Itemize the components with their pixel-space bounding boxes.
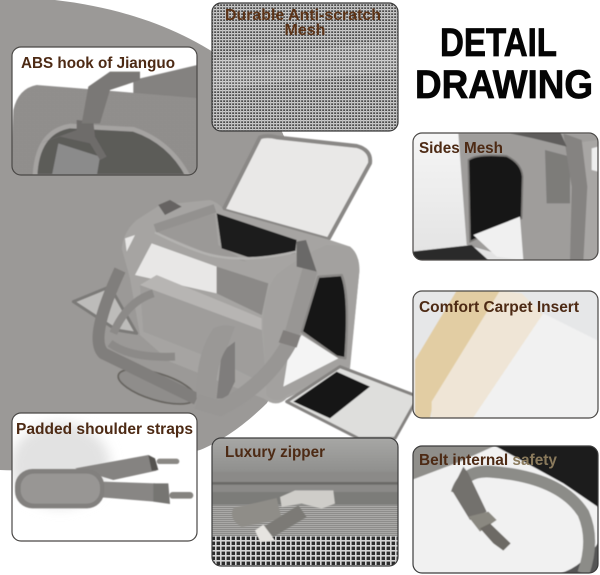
large mesh strip	[212, 536, 398, 566]
front door opening	[302, 275, 347, 358]
panel: anti-scratch mesh	[212, 3, 398, 131]
mesh outline	[212, 3, 398, 131]
end face	[263, 245, 359, 400]
fine mesh band	[212, 505, 398, 536]
front handle loop	[197, 325, 235, 398]
carpet photo	[412, 289, 600, 420]
panel: padded shoulder straps	[10, 413, 197, 541]
panel: luxury zipper	[212, 437, 398, 566]
opening piping	[155, 232, 297, 258]
black interior	[217, 213, 297, 258]
top opening	[155, 213, 247, 262]
panel: internal safety belt	[412, 445, 600, 575]
panel: ABS hook	[10, 47, 200, 177]
lower front fabric	[140, 285, 267, 385]
fabric band	[140, 275, 262, 330]
front handle	[217, 342, 235, 398]
carpet outline	[413, 291, 598, 418]
window sliver	[125, 235, 135, 252]
top back bar	[155, 208, 215, 228]
straps photo	[12, 414, 196, 510]
mesh label: Durable Anti-scratch	[225, 7, 381, 24]
carrier drawing	[73, 200, 418, 438]
top hook	[158, 200, 182, 215]
zipper outline	[212, 438, 398, 566]
side mesh panel	[217, 267, 268, 315]
open lid	[223, 136, 370, 239]
front door flap	[287, 367, 418, 438]
title line one: DETAIL	[440, 21, 557, 65]
left strap	[99, 270, 197, 399]
shoulder strap	[197, 270, 310, 408]
sides mesh outline	[413, 133, 598, 260]
grey background shape	[0, 0, 303, 470]
white window	[135, 243, 217, 293]
title	[415, 21, 593, 107]
straps outline	[12, 413, 197, 541]
zipper photo	[212, 437, 398, 566]
strap slider	[279, 330, 301, 348]
belt photo	[412, 445, 600, 575]
ABS hook outline	[12, 47, 197, 175]
left handle	[110, 293, 175, 357]
shoulder pad	[115, 362, 199, 411]
sides mesh photo	[412, 132, 600, 262]
left door flap	[73, 287, 137, 333]
flap black lining	[293, 372, 370, 418]
mesh label: Mesh	[285, 22, 325, 39]
sides mesh label: Sides Mesh	[419, 140, 503, 157]
straps label: Padded shoulder straps	[16, 421, 193, 438]
carrier body	[122, 200, 359, 403]
zipper label: Luxury zipper	[225, 444, 325, 461]
ABS hook photo	[10, 47, 200, 177]
fleece pad	[283, 335, 338, 387]
product photo: open pet carrier	[73, 136, 418, 438]
carpet label: Comfort Carpet Insert	[419, 299, 580, 316]
panel: sides mesh	[412, 132, 600, 262]
panel: comfort carpet insert	[412, 289, 600, 420]
ABS hook label: ABS hook of Jianguo	[21, 55, 175, 72]
strap top buckle	[297, 240, 317, 272]
belt label: Belt internal safety	[419, 452, 557, 469]
mesh photo	[212, 3, 398, 131]
belt outline	[413, 446, 598, 573]
